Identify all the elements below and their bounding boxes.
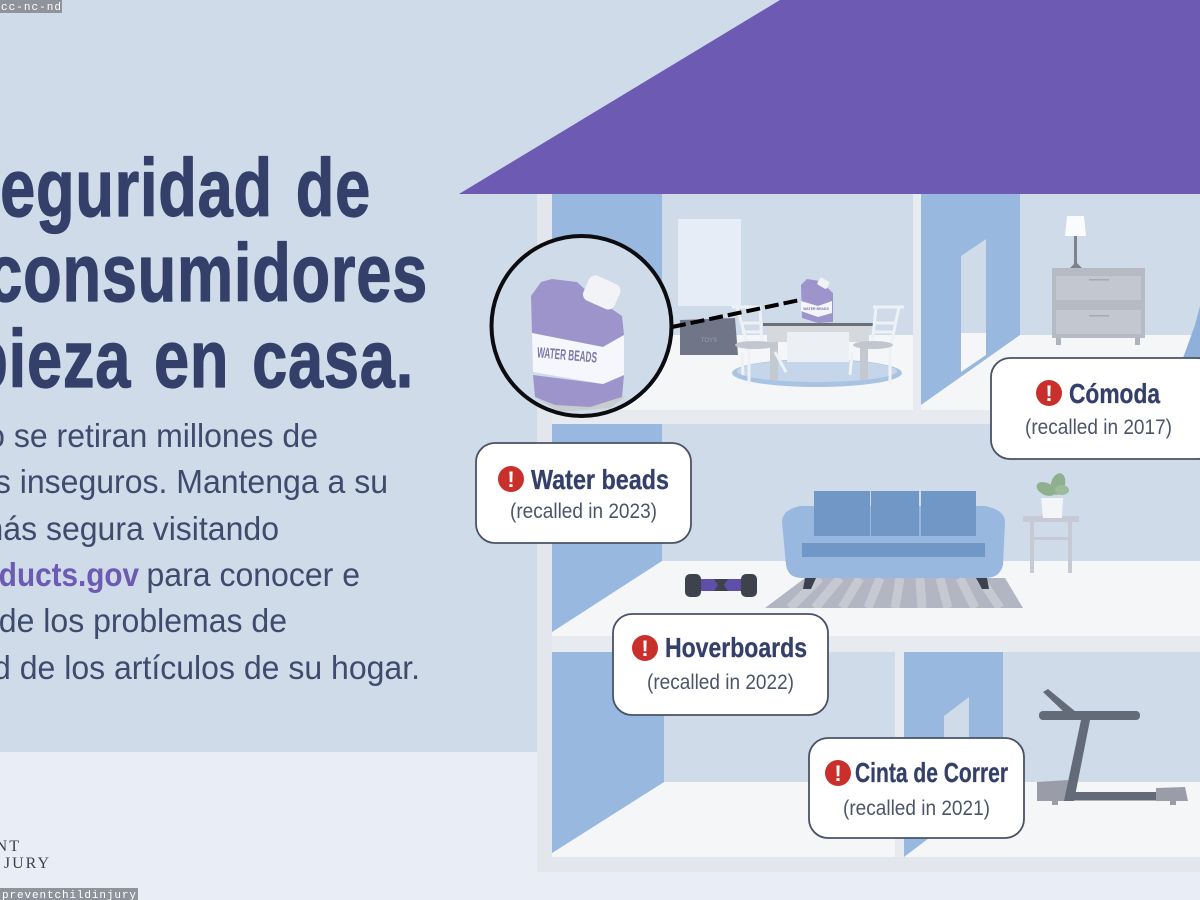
chair left	[732, 307, 786, 385]
partition: upper room	[913, 194, 1020, 410]
floor slab: upper	[552, 410, 1200, 424]
partition: lower room	[895, 652, 1003, 857]
rug under table	[732, 359, 902, 387]
magnifier circle	[492, 236, 672, 416]
logo text	[0, 838, 51, 872]
callout subtitle: (recalled in 2017)	[1025, 416, 1172, 439]
storage box	[680, 318, 738, 355]
callout: hoverboards	[613, 614, 828, 715]
dresser	[1052, 268, 1145, 345]
callout title: Hoverboards	[665, 632, 807, 663]
treadmill	[1037, 689, 1188, 805]
dashed pointer line	[672, 300, 800, 327]
callout title: Water beads	[531, 464, 669, 495]
small water beads jar	[801, 277, 833, 323]
sofa	[782, 491, 1005, 589]
background ground	[0, 752, 1200, 900]
callout title: Cinta de Correr	[855, 757, 1008, 788]
callout subtitle: (recalled in 2021)	[843, 797, 990, 820]
callout: cinta de correr	[809, 738, 1024, 838]
house outer wall	[537, 194, 1200, 872]
callout: comoda	[991, 358, 1200, 459]
striped rug	[765, 578, 1023, 608]
floor surface: upper	[552, 335, 1200, 410]
inner rug	[737, 360, 897, 382]
alert icon	[498, 466, 524, 492]
left wall: upper	[552, 194, 662, 410]
hoverboard	[685, 574, 757, 597]
large water beads jar: WATER BEADS	[536, 344, 598, 367]
body text: para conocer e	[147, 557, 360, 593]
body text	[0, 418, 420, 686]
alert icon	[1036, 380, 1062, 406]
side table with plant	[1023, 472, 1079, 573]
alert icon: !	[641, 636, 649, 661]
blue chair edge	[1183, 306, 1200, 358]
floor surface: lower	[552, 782, 1200, 857]
alert icon: !	[1045, 381, 1053, 406]
alert icon	[825, 760, 851, 786]
dining table	[763, 323, 873, 380]
alert icon: !	[507, 467, 515, 492]
chair right	[850, 307, 904, 385]
callout subtitle: (recalled in 2022)	[647, 671, 794, 694]
lamp	[1065, 216, 1086, 269]
large water beads jar	[531, 273, 624, 407]
house illustration	[459, 0, 1200, 872]
roof	[459, 0, 1200, 194]
callout: water beads	[476, 443, 691, 543]
callout subtitle: (recalled in 2023)	[510, 500, 657, 523]
alert icon	[632, 635, 658, 661]
left wall: middle	[552, 424, 662, 632]
room back walls	[552, 194, 1200, 857]
license tag: cc-nc-nd	[1, 2, 61, 14]
floor slab: middle	[552, 636, 1200, 652]
whiteboard on wall	[678, 219, 741, 306]
callout title: Cómoda	[1069, 378, 1160, 409]
heading: consumidores	[0, 227, 428, 319]
alert icon: !	[834, 761, 842, 786]
logo text: JURY	[4, 855, 51, 872]
storage box: TOYS	[701, 338, 717, 344]
heading	[0, 142, 428, 405]
small water beads jar: WATER BEADS	[803, 307, 829, 311]
left wall: lower	[552, 652, 664, 853]
floor surface: middle	[552, 561, 1200, 636]
